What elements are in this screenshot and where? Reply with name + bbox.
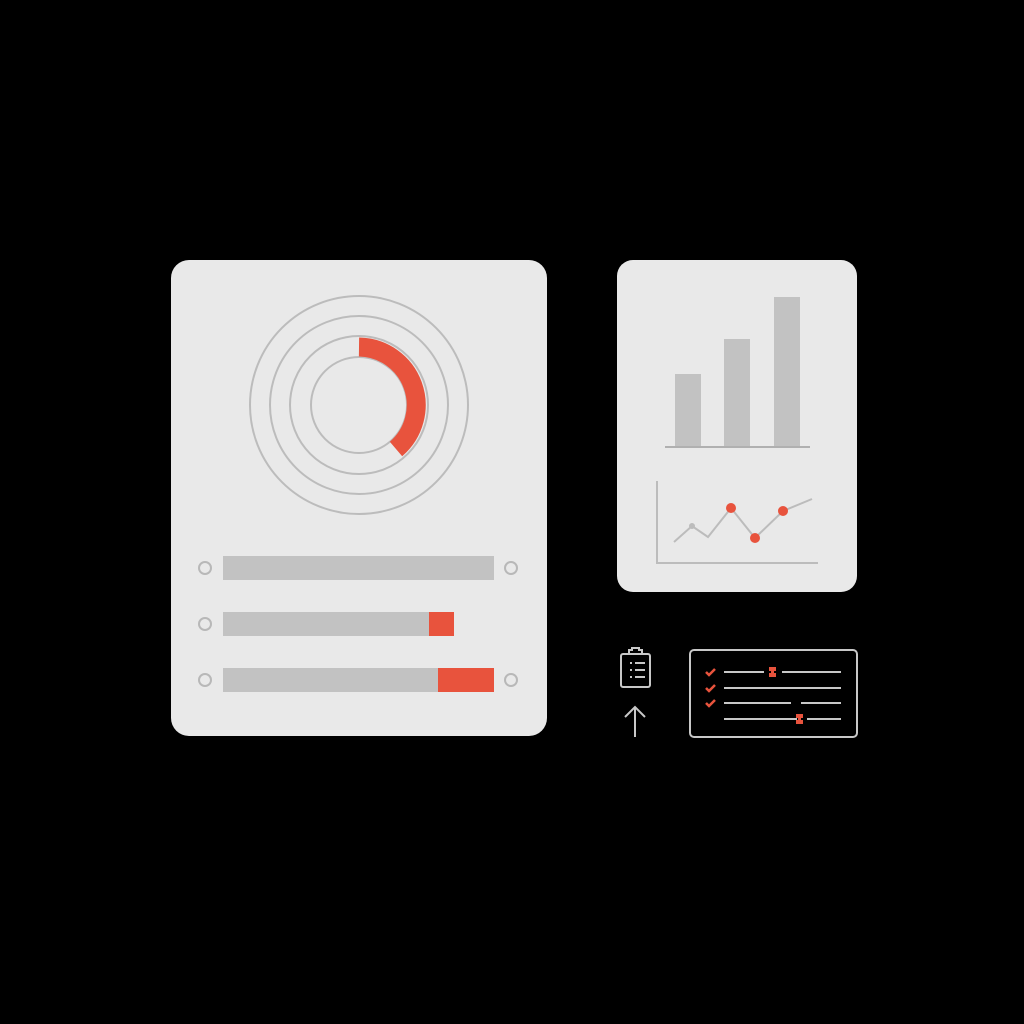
icon: clipboard: [621, 648, 650, 687]
checklist box: [690, 650, 857, 737]
bar row 1: [199, 556, 517, 580]
donut arc red: [359, 347, 416, 449]
arrow up: [625, 707, 645, 737]
line chart: [657, 481, 818, 563]
concentric circles: [250, 296, 468, 514]
bar row 2: [199, 612, 454, 636]
panel: right chart card: [617, 260, 857, 592]
bar chart: [665, 297, 810, 448]
panel: left dashboard card: [171, 260, 547, 736]
bar row 3: [199, 668, 517, 692]
